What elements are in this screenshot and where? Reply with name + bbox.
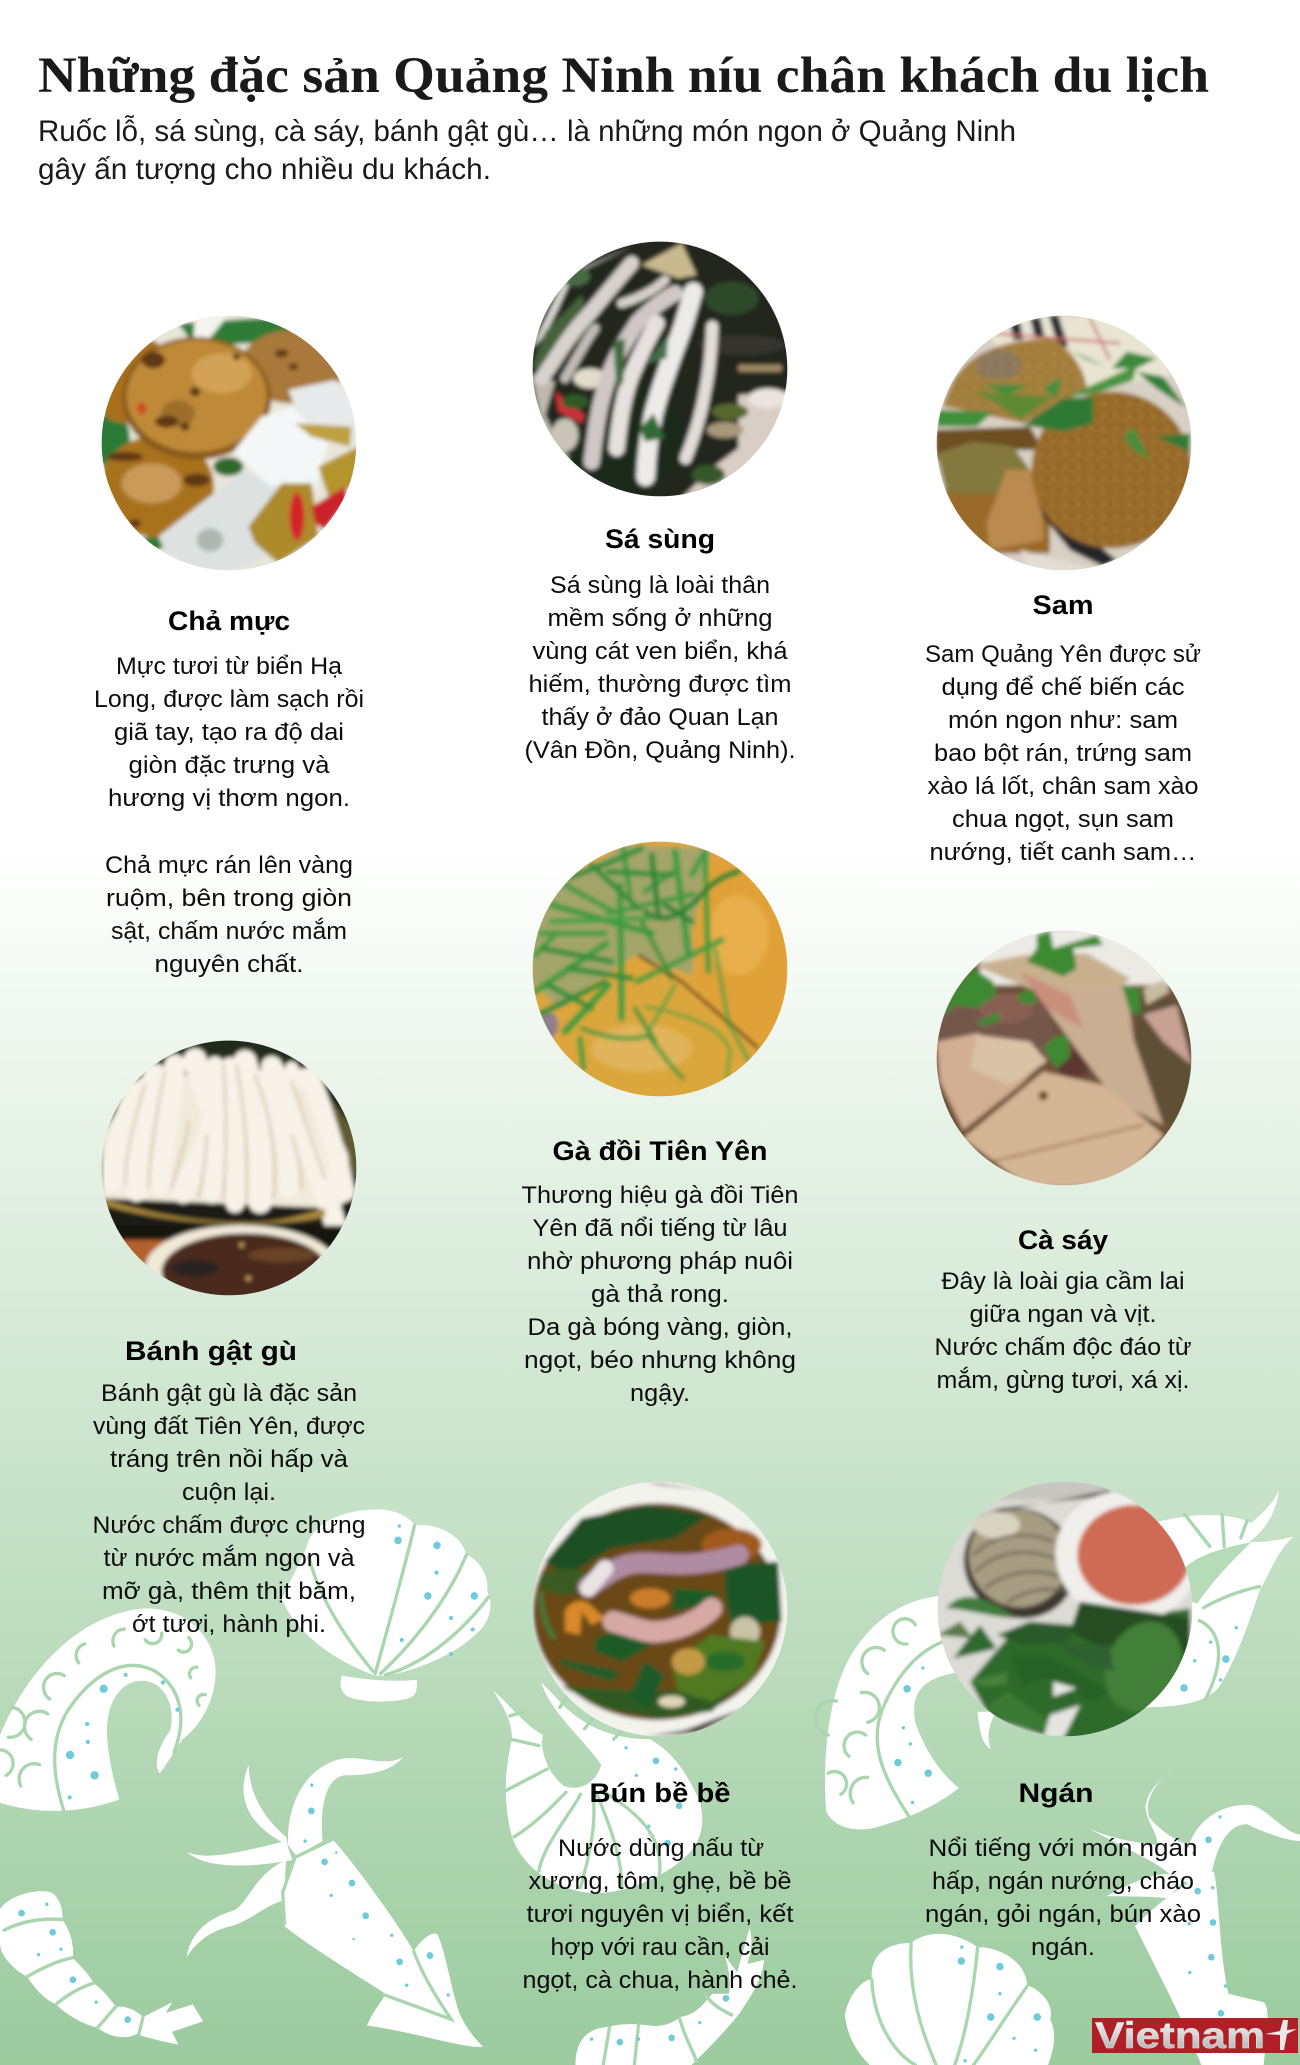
text: sá sùng: mềm sống ở những xyxy=(548,605,772,632)
text: cà sáy: Nước chấm độc đáo từ xyxy=(934,1334,1192,1361)
photo: ngán xyxy=(938,1482,1192,1736)
text: bánh gật gù: cuộn lại. xyxy=(182,1479,276,1506)
icon: squid xyxy=(187,1757,483,2047)
text: sam: nướng, tiết canh sam… xyxy=(930,839,1196,866)
icon: shrimp bottom left xyxy=(0,1891,203,2045)
photo: gà đồi xyxy=(532,842,788,1096)
subtitle: Ruốc lỗ, sá sùng, cà sáy, bánh gật gù… là những món ngon ở Quảng Ninh xyxy=(38,115,1016,148)
icon: shrimp top right xyxy=(1139,1490,1293,1707)
text: sá sùng: (Vân Đồn, Quảng Ninh). xyxy=(524,737,796,764)
icon: squid bottom right xyxy=(1079,1771,1300,2065)
photo: cà sáy xyxy=(936,930,1192,1186)
text: cà sáy: mắm, gừng tươi, xá xị. xyxy=(936,1367,1190,1394)
text: bánh gật gù: mỡ gà, thêm thịt băm, xyxy=(102,1578,356,1605)
text: chả mực: sật, chấm nước mắm xyxy=(111,918,347,945)
panel: sá sùng xyxy=(524,235,796,764)
text: ngán: ngán, gỏi ngán, bún xào xyxy=(925,1901,1201,1928)
text: sá sùng: thấy ở đảo Quan Lạn xyxy=(542,704,778,731)
text: chả mực xyxy=(94,653,364,978)
panel: ngán xyxy=(925,1475,1213,1961)
text: sá sùng xyxy=(524,572,796,764)
icon: octopus tentacle right xyxy=(815,1595,996,1829)
decorative sea creatures, right side xyxy=(815,1490,1300,2065)
text: chả mực: Chả mực rán lên vàng xyxy=(105,852,353,879)
panel: sam xyxy=(925,310,1201,866)
icon: curled shrimp center xyxy=(493,1682,702,1893)
text: ngán: Nổi tiếng với món ngán xyxy=(928,1835,1198,1862)
text: bánh gật gù: ớt tươi, hành phi. xyxy=(132,1611,326,1638)
heading: sá sùng: Sá sùng xyxy=(605,524,715,554)
text: gà đồi: Thương hiệu gà đồi Tiên xyxy=(522,1182,798,1209)
text: sam: chua ngọt, sụn sam xyxy=(952,806,1174,833)
text: cà sáy xyxy=(934,1268,1192,1394)
icon: octopus tentacle xyxy=(0,1608,216,1812)
text: ngán xyxy=(925,1835,1201,1961)
text: chả mực: Mực tươi từ biển Hạ xyxy=(116,653,342,680)
text: sam: Sam Quảng Yên được sử xyxy=(925,641,1201,668)
panel: bún bề bề xyxy=(522,1475,798,1994)
text: gà đồi: ngậy. xyxy=(630,1380,690,1407)
panel: gà đồi Tiên Yên xyxy=(522,835,798,1407)
photo: bánh gật gù xyxy=(102,1040,356,1296)
panel: bánh gật gù xyxy=(92,1035,366,1638)
text: gà đồi: Yên đã nổi tiếng từ lâu xyxy=(532,1215,788,1242)
text: cà sáy: Đây là loài gia cầm lai xyxy=(942,1268,1184,1295)
text: chả mực: giòn đặc trưng và xyxy=(128,752,330,779)
text: bánh gật gù: tráng trên nồi hấp và xyxy=(110,1446,348,1473)
text: chả mực: Long, được làm sạch rồi xyxy=(94,686,364,713)
heading: bún bề bề: Bún bề bề xyxy=(590,1778,730,1808)
text: bún bề bề xyxy=(522,1835,798,1994)
text: bún bề bề: hợp với rau cần, cải xyxy=(550,1934,770,1961)
text: bún bề bề: xương, tôm, ghẹ, bề bề xyxy=(528,1868,792,1895)
text: bánh gật gù: từ nước mắm ngon và xyxy=(104,1545,355,1572)
subtitle xyxy=(38,115,1016,186)
text: cà sáy: giữa ngan và vịt. xyxy=(970,1301,1156,1328)
photo: sam xyxy=(936,316,1192,570)
decorative sea creatures, left side xyxy=(0,1509,764,2065)
text: sam: bao bột rán, trứng sam xyxy=(934,740,1192,767)
title: Những đặc sản Quảng Ninh níu chân khách du lịch xyxy=(38,48,1209,104)
text: bún bề bề: Nước dùng nấu từ xyxy=(558,1835,764,1862)
text: ngán: ngán. xyxy=(1031,1934,1095,1961)
text: gà đồi: ngọt, béo nhưng không xyxy=(524,1347,796,1374)
text: sam: món ngon như: sam xyxy=(948,707,1178,734)
text: sam: dụng để chế biến các xyxy=(942,674,1184,701)
text: sá sùng: vùng cát ven biển, khá xyxy=(532,638,788,665)
heading: cà sáy: Cà sáy xyxy=(1018,1225,1108,1255)
heading: chả mực: Chả mực xyxy=(168,606,290,636)
photo: chả mực xyxy=(102,316,356,570)
logo: Vietnam+: Vietnam xyxy=(1095,2015,1265,2056)
heading: bánh gật gù: Bánh gật gù xyxy=(125,1336,297,1366)
text: bún bề bề: tươi nguyên vị biển, kết xyxy=(526,1901,794,1928)
text: gà đồi xyxy=(522,1182,798,1407)
text: chả mực: ruộm, bên trong giòn xyxy=(106,885,352,912)
text: bánh gật gù xyxy=(92,1380,366,1638)
text: bún bề bề: ngọt, cà chua, hành chẻ. xyxy=(522,1967,798,1994)
text: sá sùng: hiếm, thường được tìm xyxy=(528,671,792,698)
photo: sá sùng xyxy=(532,242,788,496)
heading: ngán: Ngán xyxy=(1018,1778,1094,1808)
text: chả mực: hương vị thơm ngon. xyxy=(108,785,350,812)
text: bánh gật gù: Bánh gật gù là đặc sản xyxy=(101,1380,357,1407)
heading: sam: Sam xyxy=(1032,590,1094,620)
icon: shell and shrimp bottom center xyxy=(575,1928,764,2065)
text: gà đồi: gà thả rong. xyxy=(591,1281,729,1308)
photo: bún bề bề xyxy=(532,1482,788,1736)
text: ngán: hấp, ngán nướng, cháo xyxy=(932,1868,1194,1895)
text: bánh gật gù: Nước chấm được chưng xyxy=(92,1512,366,1539)
text: chả mực: nguyên chất. xyxy=(154,951,304,978)
logo: Vietnam+ xyxy=(1092,2015,1298,2056)
text: chả mực: giã tay, tạo ra độ dai xyxy=(114,719,344,746)
panel: cà sáy xyxy=(930,925,1200,1394)
subtitle: gây ấn tượng cho nhiều du khách. xyxy=(38,153,491,186)
text: gà đồi: nhờ phương pháp nuôi xyxy=(527,1248,793,1275)
text: bánh gật gù: vùng đất Tiên Yên, được xyxy=(93,1413,365,1440)
text: gà đồi: Da gà bóng vàng, giòn, xyxy=(528,1314,792,1341)
text: sam: xào lá lốt, chân sam xào xyxy=(928,773,1198,800)
text: sam xyxy=(925,641,1201,866)
heading: gà đồi: Gà đồi Tiên Yên xyxy=(552,1136,768,1166)
icon: scallop shell bottom xyxy=(845,1934,1054,2065)
text: sá sùng: Sá sùng là loài thân xyxy=(550,572,770,599)
icon: scallop shell xyxy=(282,1509,491,1702)
panel: chả mực xyxy=(77,310,365,978)
